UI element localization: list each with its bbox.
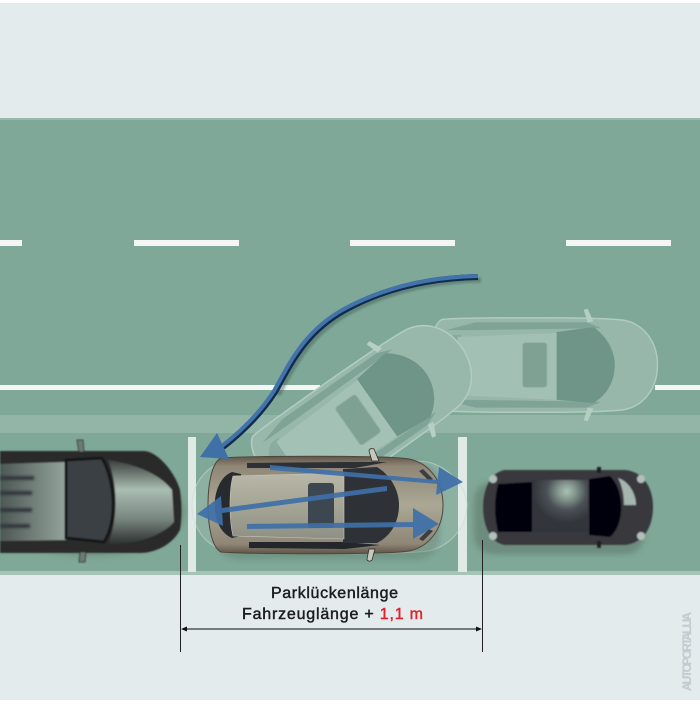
watermark: AUTOPORTAL.UA xyxy=(680,612,694,691)
ghost car: start position xyxy=(430,309,657,421)
blue manoeuvre arrow 3 xyxy=(247,508,439,539)
lane markings: centre dashes xyxy=(0,240,671,246)
label: Fahrzeuglänge + 1,1 m: Fahrzeuglänge + 1,1 m xyxy=(242,606,423,623)
blue manoeuvre arrow 2 xyxy=(197,486,387,526)
right parked car xyxy=(474,467,653,554)
main car in parking space xyxy=(208,449,443,561)
dimension line: gap length xyxy=(180,540,482,652)
road surface xyxy=(0,118,700,575)
ghost outline around parked car xyxy=(192,459,467,554)
lane marking: parking lane edge xyxy=(0,385,700,390)
blue manoeuvre arrow 1 xyxy=(270,465,463,495)
left parked car xyxy=(0,440,185,562)
label: Parklückenlänge: Parklückenlänge xyxy=(271,585,398,602)
ghost car: turning position xyxy=(236,300,495,530)
parking bay markings xyxy=(188,437,467,572)
blue entry path arrow xyxy=(200,276,481,459)
